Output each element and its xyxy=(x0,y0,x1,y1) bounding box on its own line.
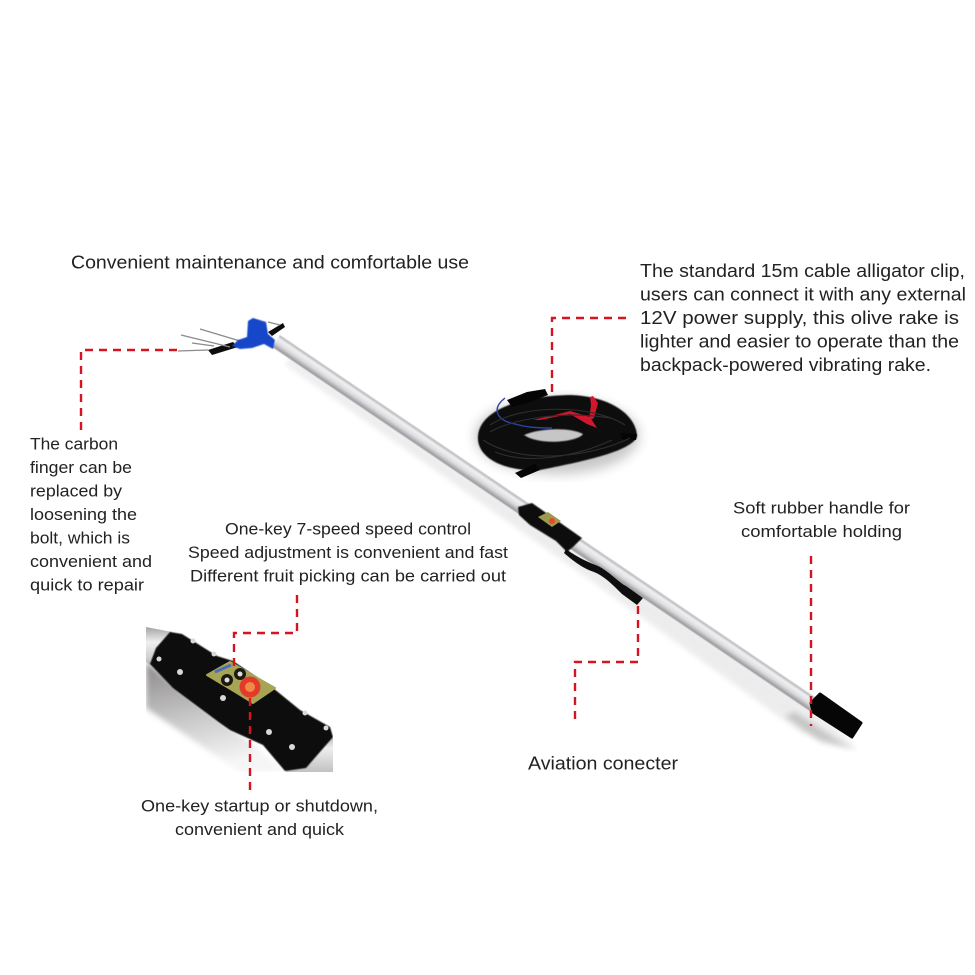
text block: cable description: users can connect it with any external xyxy=(640,284,966,304)
image: coiled cable with clips xyxy=(475,389,639,478)
text block: cable description xyxy=(640,260,966,375)
text block: startup: convenient and quick xyxy=(175,820,345,839)
image: olive rake pole xyxy=(178,318,861,750)
label: aviation connector: Aviation conecter xyxy=(528,752,678,774)
text block: carbon finger: finger can be xyxy=(30,458,132,477)
text block: carbon finger: The carbon xyxy=(30,434,118,454)
text block: rubber handle: comfortable holding xyxy=(741,522,902,541)
text block: carbon finger: convenient and xyxy=(30,552,152,571)
text block: rubber handle: Soft rubber handle for xyxy=(733,498,910,518)
callout line: cable xyxy=(552,318,632,392)
text block: carbon finger: quick to repair xyxy=(30,576,144,594)
text block: cable description: The standard 15m cable alligator clip, xyxy=(640,260,965,281)
callout line: handle xyxy=(810,556,812,726)
text block: startup xyxy=(141,796,378,839)
text block: rubber handle xyxy=(733,498,910,541)
text block: carbon finger: bolt, which is xyxy=(30,528,130,548)
handle xyxy=(811,694,861,737)
aluminium pole xyxy=(272,335,818,711)
rake head xyxy=(178,318,285,355)
text block: speed control xyxy=(188,520,508,586)
inset: control switch close-up xyxy=(146,627,333,772)
power button xyxy=(240,676,260,698)
text block: speed control: Speed adjustment is convenient and fast xyxy=(188,543,508,562)
text block: speed control: Different fruit picking can be carried out xyxy=(190,566,506,586)
text block: cable description: lighter and easier to operate than the xyxy=(640,330,959,352)
inset silver tube and shadow xyxy=(146,627,172,665)
callout line: speed control xyxy=(234,595,297,666)
callout line: carbon finger xyxy=(81,350,180,430)
pole shadow xyxy=(285,358,858,750)
text block: cable description: 12V power supply, this olive rake is xyxy=(640,307,959,328)
text block: carbon finger: loosening the xyxy=(30,505,137,524)
handle shadow xyxy=(785,712,855,750)
callout line: aviation connector xyxy=(575,606,638,723)
callout line: power button xyxy=(249,698,251,792)
heading: convenient maintenance: Convenient maintenance and comfortable use xyxy=(71,252,469,272)
text block: speed control: One-key 7-speed speed control xyxy=(225,520,471,538)
grip studs xyxy=(156,638,328,750)
text block: carbon finger xyxy=(30,434,152,594)
text block: carbon finger: replaced by xyxy=(30,482,123,500)
text block: cable description: backpack-powered vibrating rake. xyxy=(640,354,931,375)
connector cable xyxy=(564,549,643,605)
inset black grip xyxy=(150,632,333,771)
control badge xyxy=(207,662,275,703)
control grip xyxy=(518,503,582,552)
text block: startup: One-key startup or shutdown, xyxy=(141,796,378,816)
